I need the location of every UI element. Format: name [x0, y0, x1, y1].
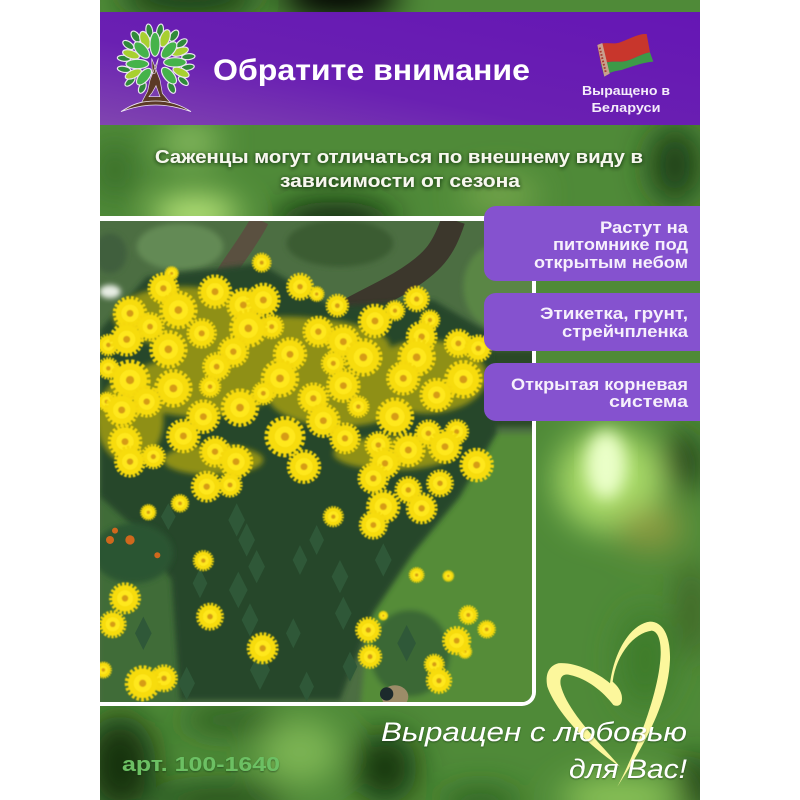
slogan: Выращен с любовью: [381, 717, 687, 747]
photo background: trees and grass: [93, 220, 540, 710]
flag caption: Беларуси: [592, 101, 660, 115]
badge: label, soil, stretch film: Этикетка, грунт,: [540, 305, 688, 323]
infographic canvas: [100, 0, 700, 800]
photo: yellow flowering bush: [93, 220, 540, 710]
article number: арт. 100-1640: [122, 754, 280, 776]
bokeh green background: [84, 0, 715, 800]
badge: open-air nursery: [484, 206, 700, 281]
slogan: [381, 717, 688, 784]
garden ornament: [380, 685, 408, 702]
slogan: для Вас!: [569, 754, 688, 784]
badge: open-air nursery: питомнике под: [553, 236, 689, 254]
photo frame: [100, 216, 536, 706]
subheading: [155, 147, 643, 191]
badge: open root system: система: [609, 393, 689, 411]
feature badges: [484, 206, 700, 421]
flag caption: [582, 84, 670, 115]
header band: [100, 12, 700, 125]
badge: label, soil, stretch film: стрейчпленка: [562, 323, 689, 341]
logo: tree: [117, 24, 195, 112]
badge: open root system: [484, 363, 700, 421]
subheading: зависимости от сезона: [280, 171, 521, 191]
badge: label, soil, stretch film: [484, 293, 700, 351]
subheading: Саженцы могут отличаться по внешнему виду в: [155, 147, 643, 167]
flag caption: Выращено в: [582, 84, 670, 98]
title: Обратите внимание: [213, 54, 530, 87]
bush foliage: [93, 263, 497, 702]
icon: heart: [547, 622, 670, 787]
flower heads: [96, 254, 494, 698]
badge: open-air nursery: открытым небом: [534, 254, 688, 272]
badge: open-air nursery: Растут на: [600, 219, 689, 237]
badge: open root system: Открытая корневая: [511, 376, 688, 394]
icon: Belarus flag: [597, 34, 653, 77]
